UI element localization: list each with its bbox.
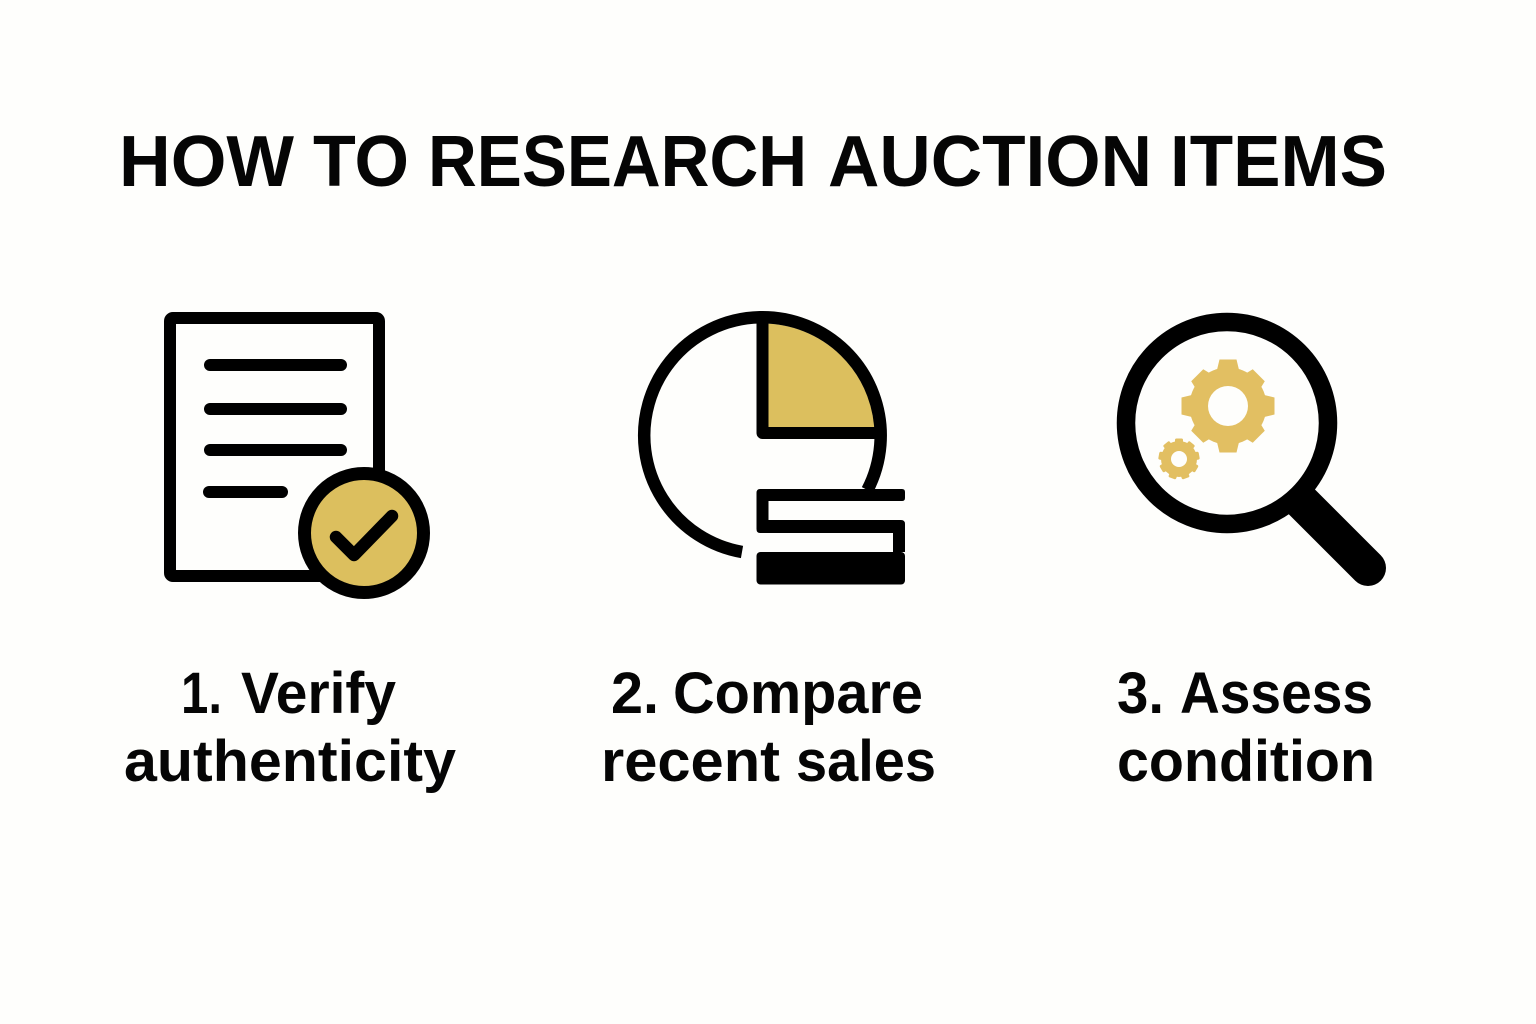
- label: step 2: recent: [601, 729, 780, 794]
- label: step 2: 2.: [611, 661, 659, 726]
- label: step 3: condition: [1117, 729, 1375, 794]
- pie outline: [644, 317, 881, 552]
- title: RESEARCH: [428, 121, 807, 202]
- small gear: [1158, 438, 1200, 480]
- title: HOW: [119, 121, 295, 202]
- title: ITEMS: [1170, 121, 1387, 202]
- icon: document with check badge: [170, 318, 424, 592]
- title: AUCTION: [828, 121, 1152, 202]
- document text lines: [209, 365, 341, 492]
- label: step 3: [1117, 661, 1375, 794]
- panel: verify authenticity: [124, 318, 456, 794]
- title: [119, 121, 1387, 202]
- icon: magnifying glass with gears: [1126, 322, 1368, 568]
- document outline: [170, 318, 379, 576]
- large gear: [1182, 360, 1274, 452]
- pie slice highlighted: [768, 324, 874, 427]
- label: step 1: authenticity: [124, 729, 456, 794]
- label: step 1: [124, 661, 456, 794]
- label: step 2: [601, 661, 936, 794]
- check mark: [336, 516, 392, 555]
- label: step 2: sales: [796, 729, 936, 794]
- title: TO: [313, 121, 409, 202]
- panel: compare recent sales: [601, 317, 936, 794]
- solid bar: [756, 552, 905, 584]
- label: step 1: Verify: [241, 661, 396, 726]
- label: step 3: Assess: [1180, 661, 1373, 726]
- label: step 2: Compare: [673, 661, 923, 726]
- magnifier handle: [1300, 500, 1368, 568]
- check badge: [304, 474, 424, 592]
- label: step 1: 1.: [181, 661, 222, 726]
- panel: assess condition: [1117, 322, 1375, 794]
- magnifier lens: [1126, 322, 1328, 524]
- stacked bars: [756, 489, 905, 552]
- label: step 3: 3.: [1117, 661, 1164, 726]
- pie slice edges: [762, 318, 880, 433]
- icon: pie chart with stacked bars: [644, 317, 905, 584]
